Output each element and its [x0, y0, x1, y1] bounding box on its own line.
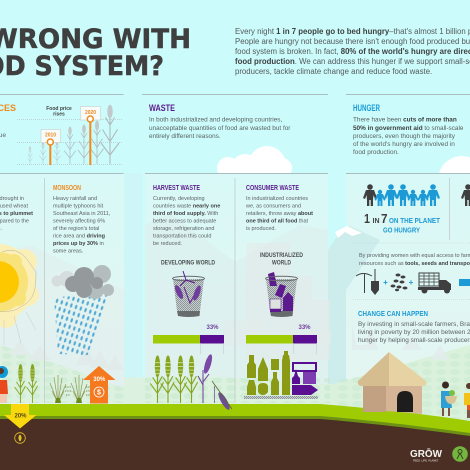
monsoon text: prices up by 30% in — [53, 241, 104, 247]
arrow: yields down 20% — [4, 404, 36, 443]
label: industrialized world: WORLD — [272, 260, 291, 266]
consumer waste text: is produced. — [246, 226, 276, 232]
callout: 1 in 7: ON THE PLANET — [389, 216, 440, 225]
icon: rice grass — [50, 375, 92, 403]
arrow: prices up 30%: 30% — [93, 377, 106, 383]
monsoon text — [53, 185, 111, 254]
logo: grow: GRŌW — [410, 448, 443, 460]
monsoon text: some areas. — [53, 248, 84, 254]
callout: 1 in 7: IN — [372, 218, 380, 225]
change can happen: hunger by helping small-scale producers — [358, 337, 470, 344]
intro text — [235, 27, 470, 76]
hunger heading and text: of the world's hungry are involved in — [353, 141, 455, 148]
harvest waste text: countries waste nearly one — [153, 204, 220, 210]
monsoon text: Heavy rainfall and — [53, 196, 97, 202]
harvest waste text: better access to adequate — [153, 218, 216, 224]
callout: 1 in 7: 1 — [364, 211, 370, 226]
harvest waste text — [153, 185, 220, 247]
label: developing world: DEVELOPING WORLD — [161, 260, 215, 266]
ground — [0, 404, 470, 470]
icon: rain cloud — [52, 265, 114, 355]
bar: industrialized world 33%: 33% — [298, 325, 311, 331]
panel: food prices header — [0, 103, 16, 139]
arrow: prices up 30%: $ — [97, 390, 101, 396]
text: drought: drought in — [0, 196, 24, 202]
logo: oxfam roundel — [452, 446, 468, 462]
icon: sun — [0, 244, 39, 345]
label: industrialized world: INDUSTRIALIZED — [260, 252, 303, 259]
label: industrialized world — [260, 252, 303, 266]
harvest waste text: HARVEST WASTE — [153, 185, 200, 192]
monsoon text: severely affecting 6% — [53, 218, 105, 224]
monsoon text: Southeast Asia in 2011, — [53, 211, 111, 217]
harvest waste text: storage, refrigeration and — [153, 226, 214, 232]
callout: 1 in 7: GO HUNGRY — [383, 226, 420, 234]
waste heading: In both industrialized and developing countries, — [149, 116, 282, 124]
monsoon text: of the region's total — [53, 226, 99, 232]
column divider — [44, 178, 450, 403]
icon: seeds — [390, 274, 408, 291]
bar: industrialized world 33% — [246, 325, 317, 354]
arrow: prices up 30% — [83, 366, 116, 404]
background field pattern — [0, 322, 470, 420]
icon: tools — [356, 269, 379, 295]
icon: person, left — [0, 366, 8, 403]
icon: plus: + — [409, 278, 414, 287]
icon: bin with packages — [266, 272, 298, 317]
harvest waste text: transportation this could — [153, 234, 211, 240]
hunger heading and text: There have been cuts of more than — [353, 116, 457, 124]
icon: plus: + — [383, 278, 388, 287]
bar: developing world 33% — [153, 325, 224, 354]
icon: bin with wheat — [172, 271, 204, 317]
icon: second farmer — [464, 383, 470, 418]
consumer waste text: In industrialized countries — [246, 196, 308, 202]
hunger heading and text: 50% in government aid to small-scale — [353, 125, 464, 132]
2010 marker: 2010 — [45, 132, 56, 138]
cloud: top centre — [217, 146, 292, 184]
monsoon text: multiple typhoons hit — [53, 204, 104, 210]
intro text: producers, tackle climate change and reduce food waste. — [235, 67, 432, 76]
hunger heading and text: producers, even though the majority — [353, 133, 456, 140]
icon: truck — [418, 273, 451, 294]
harvest waste text: third of food supply. With — [153, 211, 218, 217]
monsoon text: MONSOON — [53, 185, 81, 192]
hunger heading and text: food production. — [353, 149, 399, 156]
chart: food price rises — [17, 105, 123, 165]
waste heading — [149, 103, 291, 140]
icon: hut — [358, 352, 426, 414]
icon: food products — [244, 351, 318, 399]
logo: grow: FEED. LIFE. PLANET. — [413, 458, 439, 462]
harvest waste text: be reduced. — [153, 241, 183, 247]
waste heading: entirely different reasons. — [149, 133, 221, 140]
text: drought: used wheat — [0, 204, 28, 210]
text: drought — [0, 196, 33, 232]
consumer waste text: one third of all food that — [246, 218, 309, 224]
change can happen: CHANGE CAN HAPPEN — [358, 309, 428, 318]
consumer waste text: we, as consumers and — [245, 204, 301, 210]
icon: green wheat — [14, 364, 38, 403]
callout: 1 in 7: 7 — [381, 211, 388, 226]
title — [0, 24, 191, 82]
hunger heading and text — [353, 103, 464, 156]
harvest waste text: Currently, developing — [153, 196, 205, 202]
background mountains — [0, 213, 380, 405]
panels — [0, 173, 470, 407]
hunger heading and text: HUNGER — [353, 103, 380, 113]
text: providing women — [359, 253, 470, 267]
section rules — [0, 94, 470, 174]
consumer waste text: CONSUMER WASTE — [246, 185, 299, 192]
arrow: blue — [459, 279, 470, 286]
waste heading: WASTE — [149, 103, 175, 113]
chart: food price rises: Food price — [46, 106, 72, 112]
icon: harvest wheat — [150, 354, 232, 411]
bar: developing world 33%: 33% — [206, 325, 219, 331]
icon: 1 in 7 people — [363, 184, 470, 206]
monsoon text: rice area and driving — [53, 234, 105, 240]
change can happen — [358, 309, 470, 344]
icon: woman with basket — [441, 382, 457, 416]
consumer waste text: retailers, throw away about — [246, 211, 313, 217]
chart: food price rises: rises — [53, 112, 65, 118]
arrow: yields down 20%: 20% — [14, 414, 27, 420]
waste heading: unacceptable quantities of food are wasted but for — [149, 125, 291, 132]
2020 marker: 2020 — [85, 110, 96, 116]
callout: 1 in 7 — [364, 211, 440, 234]
cloud: top right — [431, 156, 470, 204]
consumer waste text — [245, 185, 313, 232]
